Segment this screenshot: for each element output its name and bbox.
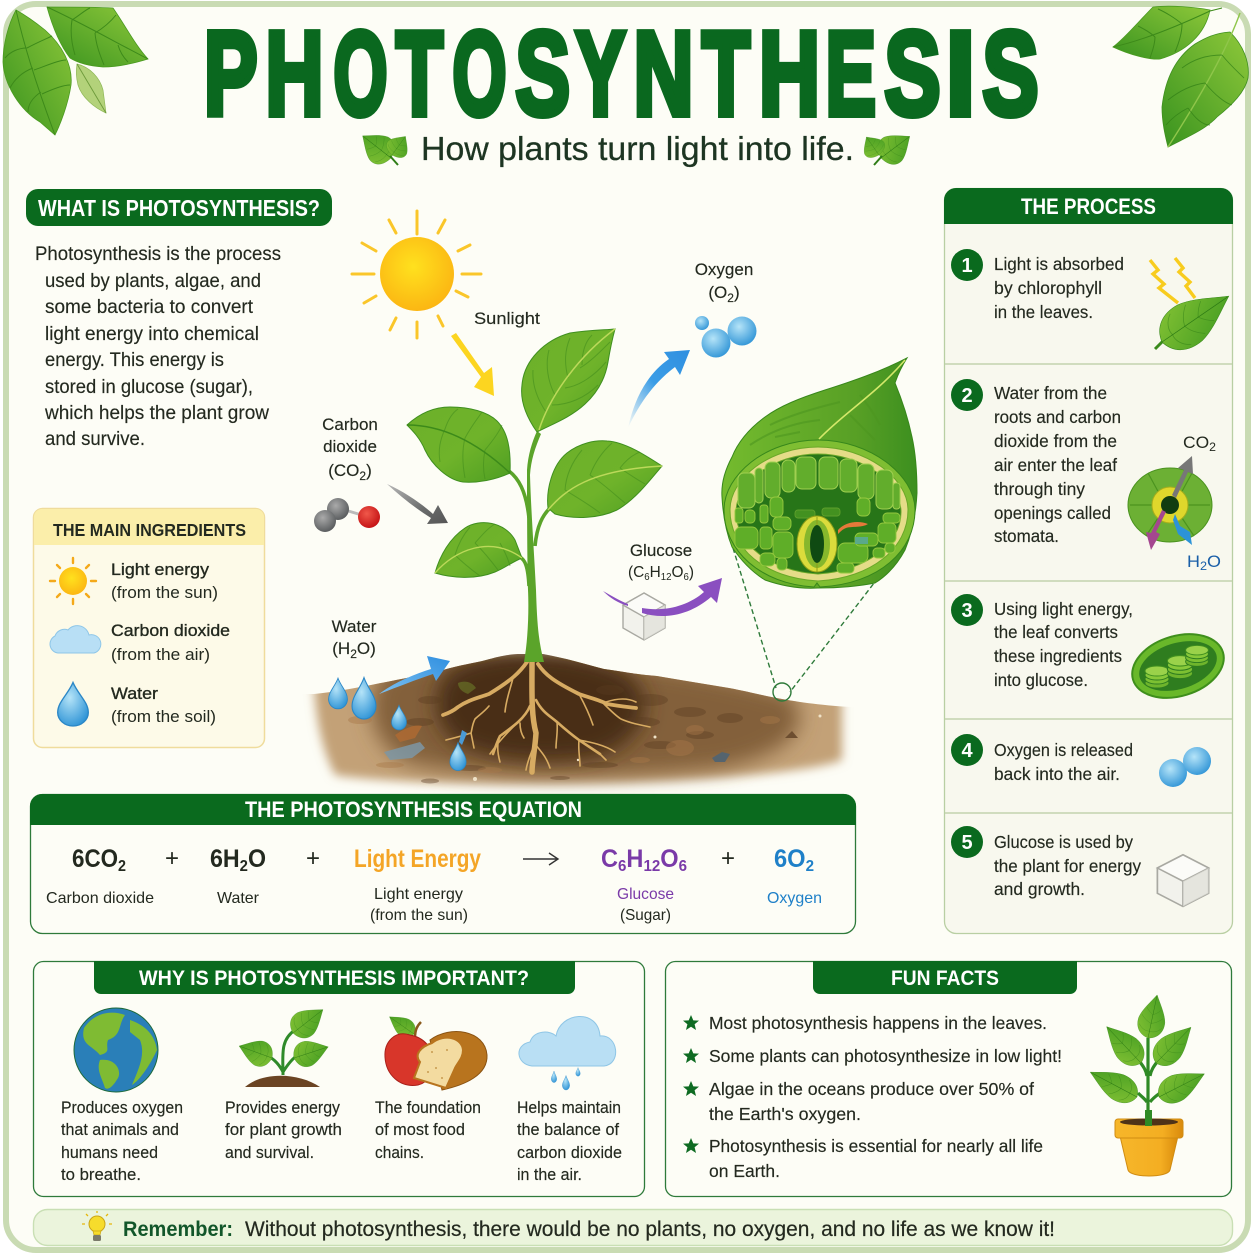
equation terms: O xyxy=(248,845,266,873)
step 4: back into the air. xyxy=(994,764,1120,784)
title: I xyxy=(946,8,975,140)
icon: sprig right xyxy=(857,124,919,170)
why: growth text: Provides energy xyxy=(225,1099,341,1117)
fact list xyxy=(683,1013,1062,1181)
equation labels: Water xyxy=(217,890,260,907)
icon: cloud xyxy=(50,626,101,653)
why: oxygen text: to breathe. xyxy=(61,1166,141,1184)
equation labels: Light energy xyxy=(374,886,463,903)
label: oxygen xyxy=(695,260,753,305)
label: water xyxy=(332,617,377,661)
heading badge: WHAT IS PHOTOSYNTHESIS? xyxy=(38,195,320,221)
label: glucose xyxy=(628,541,694,583)
subtitle: How plants turn light into life. xyxy=(421,130,854,167)
icon: water drop xyxy=(58,682,88,726)
ingredient: light energy: Light energy xyxy=(111,560,210,579)
icon: stoma xyxy=(1128,433,1221,573)
dashed zoom lines xyxy=(733,548,888,692)
title xyxy=(204,8,1038,140)
fun facts heading xyxy=(813,961,1077,994)
subtitle xyxy=(353,124,919,170)
equation terms: 6 xyxy=(618,858,627,875)
why: growth text: and survival. xyxy=(225,1144,314,1162)
chart: central plant diagram xyxy=(314,211,917,784)
icon: oxygen bubbles xyxy=(695,316,756,358)
icon: small sun xyxy=(50,558,96,604)
step 3: into glucose. xyxy=(994,670,1088,690)
roots xyxy=(443,662,650,772)
why heading xyxy=(94,961,575,994)
equation labels xyxy=(46,886,822,924)
fact list: Photosynthesis is essential for nearly all life xyxy=(709,1136,1043,1156)
label: water: 2 xyxy=(350,647,357,661)
step 5 xyxy=(951,826,1209,906)
equation terms: C xyxy=(601,845,619,873)
ingredient: carbon dioxide xyxy=(111,621,230,664)
step 1 xyxy=(951,249,1241,360)
step 3: Using light energy, xyxy=(994,599,1133,619)
fact list: on Earth. xyxy=(709,1161,780,1181)
equation terms: + xyxy=(165,845,179,872)
leaf: lower left xyxy=(435,523,522,577)
equation terms: Light Energy xyxy=(354,845,481,873)
label: H2O: H xyxy=(1187,552,1199,571)
equation labels: Oxygen xyxy=(767,890,822,907)
equation terms: 6 xyxy=(679,858,687,875)
step 2: 2 xyxy=(961,385,973,407)
title: H xyxy=(266,8,324,140)
title: T xyxy=(396,8,443,140)
panel: photosynthesis equation xyxy=(30,794,856,934)
remember text: Without photosynthesis, there would be no plants, no oxygen, and no life as we know it! xyxy=(245,1218,1055,1241)
label: glucose: 6 xyxy=(684,572,689,583)
step 2: through tiny xyxy=(994,479,1085,499)
remember text: Remember: xyxy=(123,1218,233,1241)
label: water: Water xyxy=(332,617,377,636)
equation terms: 2 xyxy=(806,858,814,875)
equation terms: 6CO xyxy=(72,845,123,873)
icon: top-right corner leaves xyxy=(1113,6,1248,147)
title: T xyxy=(702,8,750,140)
equation terms: O xyxy=(660,845,679,873)
step 3 xyxy=(951,594,1232,708)
why: balance text: Helps maintain xyxy=(517,1099,621,1117)
equation heading xyxy=(30,794,856,825)
why: food text: of most food xyxy=(375,1121,465,1139)
label: water: (H xyxy=(332,639,350,658)
panel: why is photosynthesis important xyxy=(34,961,644,1196)
leaf: left xyxy=(407,407,510,482)
ingredient: carbon dioxide: (from the air) xyxy=(111,645,210,664)
panel: the process xyxy=(944,188,1241,934)
step 4: 4 xyxy=(961,740,973,762)
icon: sprig left xyxy=(353,124,415,170)
leaf cross-section xyxy=(722,358,917,701)
icon: rain cloud xyxy=(519,1016,616,1090)
title: H xyxy=(759,8,820,140)
label: glucose: 12 xyxy=(661,572,672,583)
step 1: 1 xyxy=(961,255,973,277)
icon: light bulb xyxy=(82,1211,112,1241)
step 1: Light is absorbed xyxy=(994,254,1124,274)
why: oxygen text: humans need xyxy=(61,1144,158,1162)
equation terms: 2 xyxy=(240,858,248,875)
arrow: sunlight xyxy=(451,333,494,396)
equation terms xyxy=(72,845,814,875)
icon: oxygen molecule xyxy=(1159,747,1211,787)
paragraph: and survive. xyxy=(45,428,145,450)
paragraph: some bacteria to convert xyxy=(45,296,254,318)
icon: glucose cube xyxy=(1157,855,1209,906)
label: glucose: Glucose xyxy=(630,541,692,560)
title: S xyxy=(982,8,1038,140)
equation terms: 2 xyxy=(118,858,126,875)
label: carbon dioxide: 2 xyxy=(359,469,366,483)
step 1: by chlorophyll xyxy=(994,278,1102,298)
paragraph xyxy=(35,243,281,450)
icon: water drops xyxy=(329,678,467,771)
why: balance text: the balance of xyxy=(517,1121,619,1139)
title: S xyxy=(884,8,940,140)
ingredients heading: THE MAIN INGREDIENTS xyxy=(53,520,246,540)
equation terms: + xyxy=(721,845,735,872)
paragraph: light energy into chemical xyxy=(45,323,259,345)
fact list: the Earth's oxygen. xyxy=(709,1104,861,1124)
why: growth text: for plant growth xyxy=(225,1121,342,1139)
equation terms: + xyxy=(306,845,320,872)
icon: sugar cube xyxy=(623,593,665,640)
palisade cells xyxy=(738,457,900,509)
why: oxygen text: that animals and xyxy=(61,1121,179,1139)
title: E xyxy=(826,8,876,140)
label: glucose: O xyxy=(672,564,684,581)
label: H2O: O xyxy=(1207,552,1221,571)
label: oxygen: 2 xyxy=(727,291,734,305)
why: balance text xyxy=(517,1099,622,1184)
equation terms: 12 xyxy=(643,858,660,875)
label: H2O: 2 xyxy=(1200,559,1207,573)
label: glucose: 6 xyxy=(644,572,650,583)
ingredient: water: (from the soil) xyxy=(111,707,216,726)
title: O xyxy=(334,8,388,140)
leaf: top xyxy=(522,329,615,432)
label: carbon dioxide: ) xyxy=(366,461,372,480)
equation terms: H xyxy=(626,845,643,873)
title: N xyxy=(634,8,694,140)
label: carbon dioxide: dioxide xyxy=(323,437,377,456)
label: sunlight: Sunlight xyxy=(474,309,540,328)
label: glucose: H xyxy=(650,564,661,581)
why: food text: chains. xyxy=(375,1144,424,1162)
step 2: roots and carbon xyxy=(994,407,1121,427)
step 3: 3 xyxy=(961,600,973,622)
paragraph: Photosynthesis is the process xyxy=(35,243,281,265)
step 4: Oxygen is released xyxy=(994,740,1133,760)
ingredient: light energy xyxy=(111,560,218,602)
plant branches xyxy=(509,471,550,586)
fact list: Algae in the oceans produce over 50% of xyxy=(709,1079,1034,1099)
why: balance text: carbon dioxide xyxy=(517,1144,622,1162)
title: O xyxy=(452,8,506,140)
icon: potted plant xyxy=(1084,992,1211,1176)
icon: chloroplast xyxy=(1124,624,1232,708)
ingredient: water xyxy=(111,684,216,726)
ingredient: carbon dioxide: Carbon dioxide xyxy=(111,621,230,640)
equation labels: Carbon dioxide xyxy=(46,890,154,907)
paragraph: used by plants, algae, and xyxy=(45,270,261,292)
icon: sun xyxy=(352,211,481,338)
stem xyxy=(524,431,544,662)
label: oxygen: Oxygen xyxy=(695,260,753,279)
fact list: Most photosynthesis happens in the leaves. xyxy=(709,1013,1047,1033)
step 4 xyxy=(951,734,1211,787)
label: glucose: ) xyxy=(689,564,694,581)
why: oxygen text: Produces oxygen xyxy=(61,1099,183,1117)
paragraph: energy. This energy is xyxy=(45,349,224,371)
paragraph: stored in glucose (sugar), xyxy=(45,376,253,398)
why: food text xyxy=(375,1099,481,1162)
spongy cells xyxy=(735,497,900,573)
title: P xyxy=(204,8,258,140)
icon: sprout xyxy=(235,999,332,1087)
callout: remember xyxy=(34,1210,1232,1246)
icon: co2 molecule xyxy=(314,498,380,532)
step 3: the leaf converts xyxy=(994,622,1118,642)
step 2: stomata. xyxy=(994,526,1059,546)
why: food text: The foundation xyxy=(375,1099,481,1117)
label: carbon dioxide: Carbon xyxy=(322,415,378,434)
equation terms: 6O xyxy=(774,845,807,873)
paragraph: which helps the plant grow xyxy=(44,402,270,424)
why: oxygen text xyxy=(61,1099,183,1184)
step 2: dioxide from the xyxy=(994,431,1117,451)
icon: globe xyxy=(74,1008,158,1092)
soil xyxy=(314,651,842,784)
step 2: air enter the leaf xyxy=(994,455,1117,475)
label: CO2: CO xyxy=(1183,433,1208,452)
step 5: the plant for energy xyxy=(994,856,1141,876)
title: Y xyxy=(576,8,626,140)
label: CO2: 2 xyxy=(1209,440,1216,454)
fun facts heading: FUN FACTS xyxy=(891,967,999,990)
step 5: 5 xyxy=(961,832,973,854)
equation terms: 6H xyxy=(210,845,242,873)
step 1: in the leaves. xyxy=(994,302,1093,322)
step 5: Glucose is used by xyxy=(994,832,1133,852)
equation labels: (Sugar) xyxy=(620,907,671,924)
ingredient: light energy: (from the sun) xyxy=(111,583,218,602)
heading badge xyxy=(26,189,332,226)
leaf: right xyxy=(548,441,662,517)
label: glucose: (C xyxy=(628,564,645,581)
arrow: water xyxy=(379,656,450,694)
icon: leaf with light xyxy=(1150,258,1241,360)
arrow: oxygen xyxy=(628,350,690,428)
why: balance text: in the air. xyxy=(517,1166,582,1184)
label: oxygen: (O xyxy=(708,283,727,302)
step 5: and growth. xyxy=(994,879,1085,899)
step 2: openings called xyxy=(994,503,1111,523)
panel: what is photosynthesis xyxy=(26,189,332,450)
why heading: WHY IS PHOTOSYNTHESIS IMPORTANT? xyxy=(139,967,529,990)
step 2 xyxy=(951,379,1221,573)
equation labels: Glucose xyxy=(617,886,674,903)
stoma guard cells xyxy=(797,516,837,572)
equation heading: THE PHOTOSYNTHESIS EQUATION xyxy=(245,797,582,822)
why: growth text xyxy=(225,1099,342,1162)
step 2: Water from the xyxy=(994,383,1107,403)
label: oxygen: ) xyxy=(734,283,740,302)
process heading: THE PROCESS xyxy=(1021,194,1156,219)
label: carbon dioxide: (CO xyxy=(328,461,359,480)
arrow: carbon dioxide xyxy=(387,484,448,524)
panel: main ingredients xyxy=(34,508,264,748)
step 3: these ingredients xyxy=(994,646,1122,666)
arrow: glucose xyxy=(603,578,722,616)
icon: top-left corner leaves xyxy=(3,7,148,135)
plant leaves xyxy=(407,329,662,577)
icon: apple and bread xyxy=(384,1009,487,1090)
panel: fun facts xyxy=(666,961,1232,1196)
title: S xyxy=(516,8,570,140)
fact list: Some plants can photosynthesize in low light! xyxy=(709,1046,1062,1066)
label: water: O) xyxy=(357,639,376,658)
equation labels: (from the sun) xyxy=(370,907,468,924)
label: carbon dioxide xyxy=(322,415,378,483)
ingredient: water: Water xyxy=(111,684,158,703)
